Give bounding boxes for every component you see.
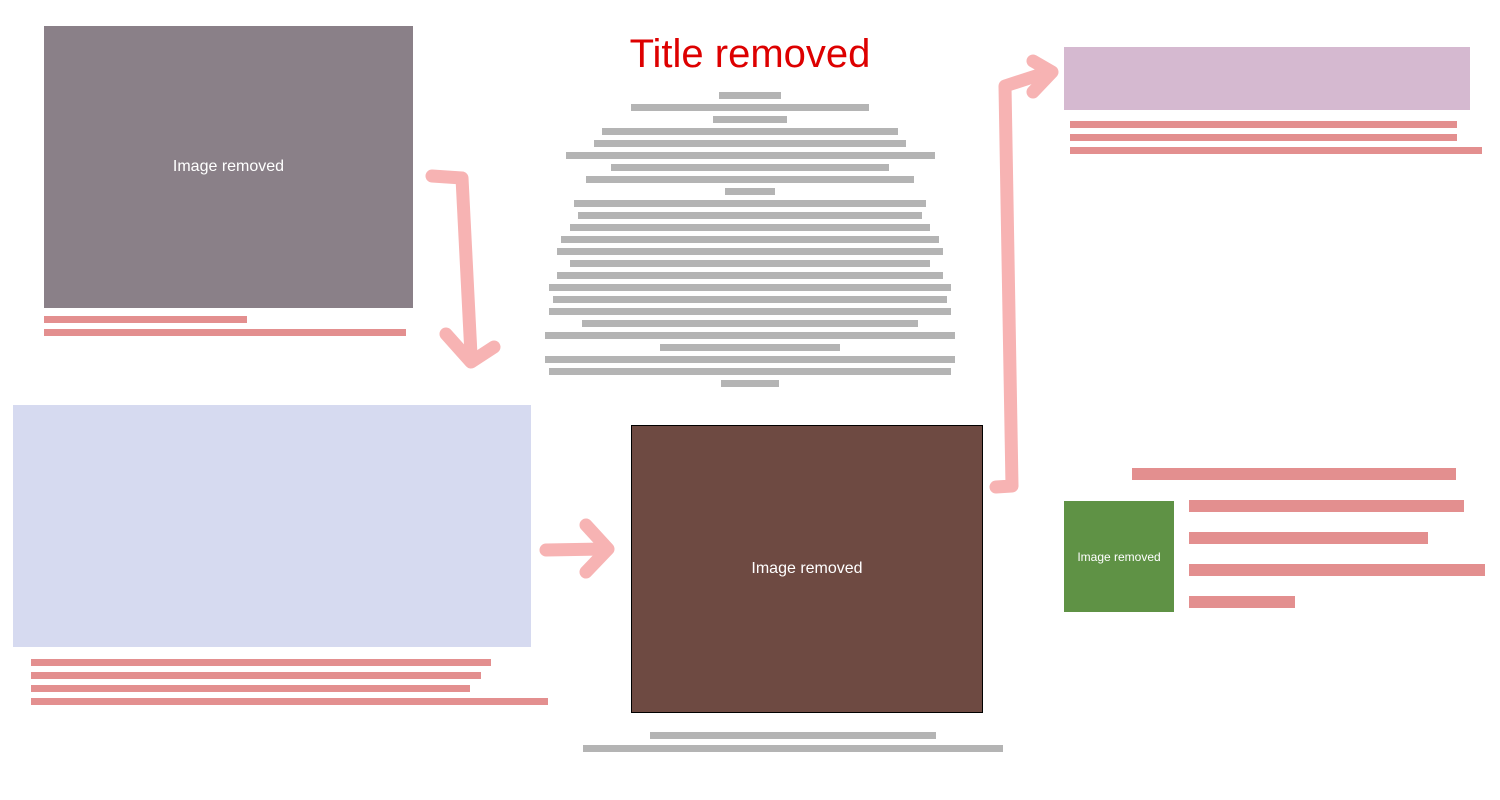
panel: lower left post placeholder — [13, 405, 531, 647]
center text block placeholder — [545, 92, 955, 387]
caption placeholder: center bottom — [583, 732, 1003, 752]
image placeholder: lower right — [1064, 501, 1174, 612]
arrow: top left to lower left — [432, 176, 494, 362]
image placeholder: center: Image removed — [751, 560, 863, 577]
arrow: post to center image — [546, 525, 608, 572]
caption placeholder: lower left — [31, 659, 548, 705]
caption placeholder: top left — [44, 316, 406, 336]
image placeholder: top left — [44, 26, 413, 308]
image placeholder: lower right: Image removed — [1077, 550, 1161, 564]
arrow: center image to top right post — [996, 61, 1052, 487]
panel: top right post placeholder — [1064, 47, 1470, 110]
title placeholder: Title removed — [630, 32, 870, 76]
image placeholder: center — [631, 425, 983, 713]
caption placeholder: top right — [1070, 121, 1482, 154]
text placeholder: lower right — [1132, 468, 1485, 608]
image placeholder: top left: Image removed — [173, 158, 284, 175]
